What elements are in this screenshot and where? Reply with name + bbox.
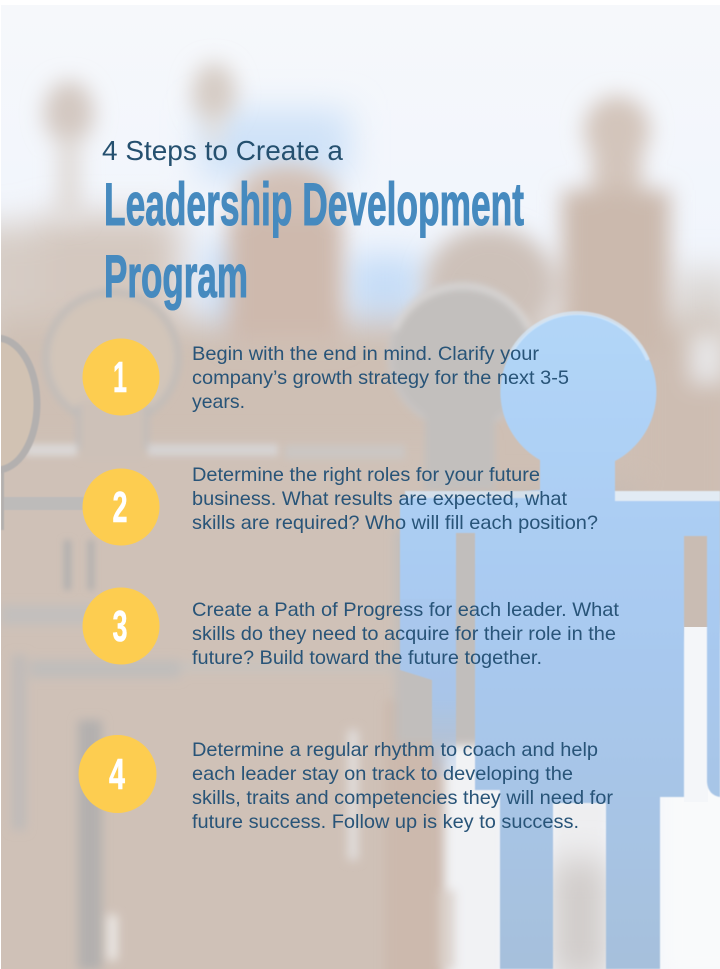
- step 1 badge: [82, 338, 160, 416]
- step 3 badge: 3: [112, 602, 128, 651]
- step 3 text: skills do they need to acquire for their role in the: [192, 624, 616, 645]
- step 4 badge: 4: [109, 750, 125, 799]
- step 1 text: Begin with the end in mind. Clarify your: [192, 344, 540, 365]
- step 2: [82, 465, 598, 546]
- step 3 text: Create a Path of Progress for each leader. What: [192, 600, 620, 621]
- step 1 text: [192, 344, 569, 413]
- step 2 text: skills are required? Who will fill each position?: [192, 513, 598, 534]
- step 1 text: company’s growth strategy for the next 3-5: [192, 368, 569, 389]
- blurred middle figures: [25, 284, 534, 590]
- step 4 text: future success. Follow up is key to success.: [192, 812, 579, 833]
- step 2 badge: [82, 468, 160, 546]
- subtitle: 4 Steps to Create a: [102, 135, 344, 166]
- step 2 badge: 2: [112, 483, 128, 532]
- step 2 text: Determine the right roles for your future: [192, 465, 540, 486]
- step 1 text: years.: [192, 392, 245, 413]
- step 4 text: each leader stay on track to developing the: [192, 764, 573, 785]
- step 4: [78, 735, 614, 833]
- step 2 text: business. What results are expected, what: [192, 489, 568, 510]
- step 4 text: Determine a regular rhythm to coach and help: [192, 740, 598, 761]
- step 3 text: [192, 600, 620, 669]
- title line 2: Program: [104, 243, 248, 310]
- step 3 text: future? Build toward the future together.: [192, 648, 542, 669]
- step 3 badge: [82, 588, 160, 664]
- step 2 text: [192, 465, 598, 534]
- heading block: [102, 135, 524, 310]
- step 4 badge: [78, 735, 156, 813]
- foreground blue figure: [400, 313, 720, 969]
- step 3: [82, 588, 620, 669]
- step 1 badge: 1: [113, 353, 127, 402]
- step 4 text: [192, 740, 614, 833]
- ring of near wooden figure at left: [0, 338, 85, 530]
- step 1: [82, 338, 569, 416]
- step 4 text: skills, traits and competencies they will need for: [192, 788, 614, 809]
